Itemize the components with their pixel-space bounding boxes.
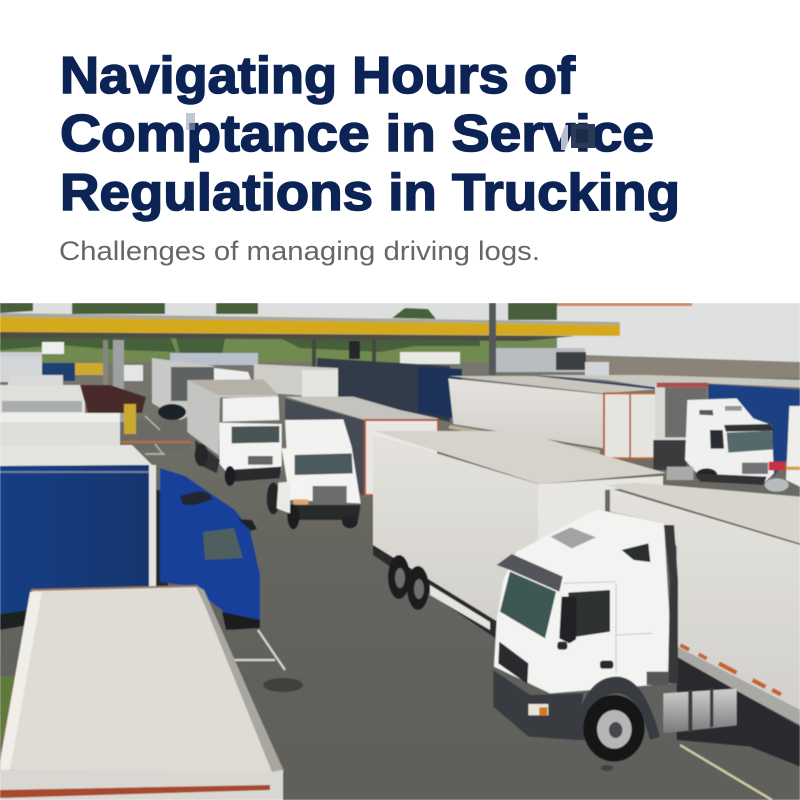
distribution building (557, 303, 800, 378)
grey trailer with orange door (285, 397, 438, 497)
title: Comptance in Service (60, 105, 654, 163)
blue truck (0, 445, 260, 630)
grass verge (0, 676, 15, 745)
left stacked white trailers (0, 356, 146, 447)
white cab, right (667, 398, 785, 485)
large right trailer (607, 483, 800, 767)
subtitle: Challenges of managing driving logs. (59, 236, 540, 266)
asphalt yard (0, 362, 800, 800)
front white trailer (373, 431, 666, 640)
title artefact (186, 113, 595, 150)
title: Regulations in Trucking (60, 164, 680, 222)
photo: truck yard (0, 303, 800, 800)
distant blue trailer and grey rear (537, 375, 800, 477)
truck behind fuel island (152, 358, 252, 420)
white trailer roof, foreground (0, 586, 283, 800)
white cab, foreground (493, 509, 737, 762)
parking markings near fuel island (122, 416, 190, 454)
white semi truck, front (267, 419, 361, 529)
tree line under canopy (0, 337, 480, 355)
white box truck (187, 379, 282, 486)
sky and distant trees (0, 303, 800, 363)
grey trailer, rear (254, 364, 338, 398)
white trailer with orange rear frame (448, 376, 657, 458)
canopy (0, 303, 620, 422)
dark blue trailer, rear (317, 358, 462, 422)
oil stains on asphalt (263, 678, 613, 771)
painted lane line (680, 745, 772, 800)
title: Navigating Hours of (60, 47, 576, 105)
title (60, 47, 680, 222)
grass field (0, 336, 560, 366)
white trailer, far right (765, 406, 800, 492)
white trailer, right of semi (373, 433, 400, 550)
parking lines, lower left (234, 630, 285, 670)
background vehicles (0, 342, 609, 381)
